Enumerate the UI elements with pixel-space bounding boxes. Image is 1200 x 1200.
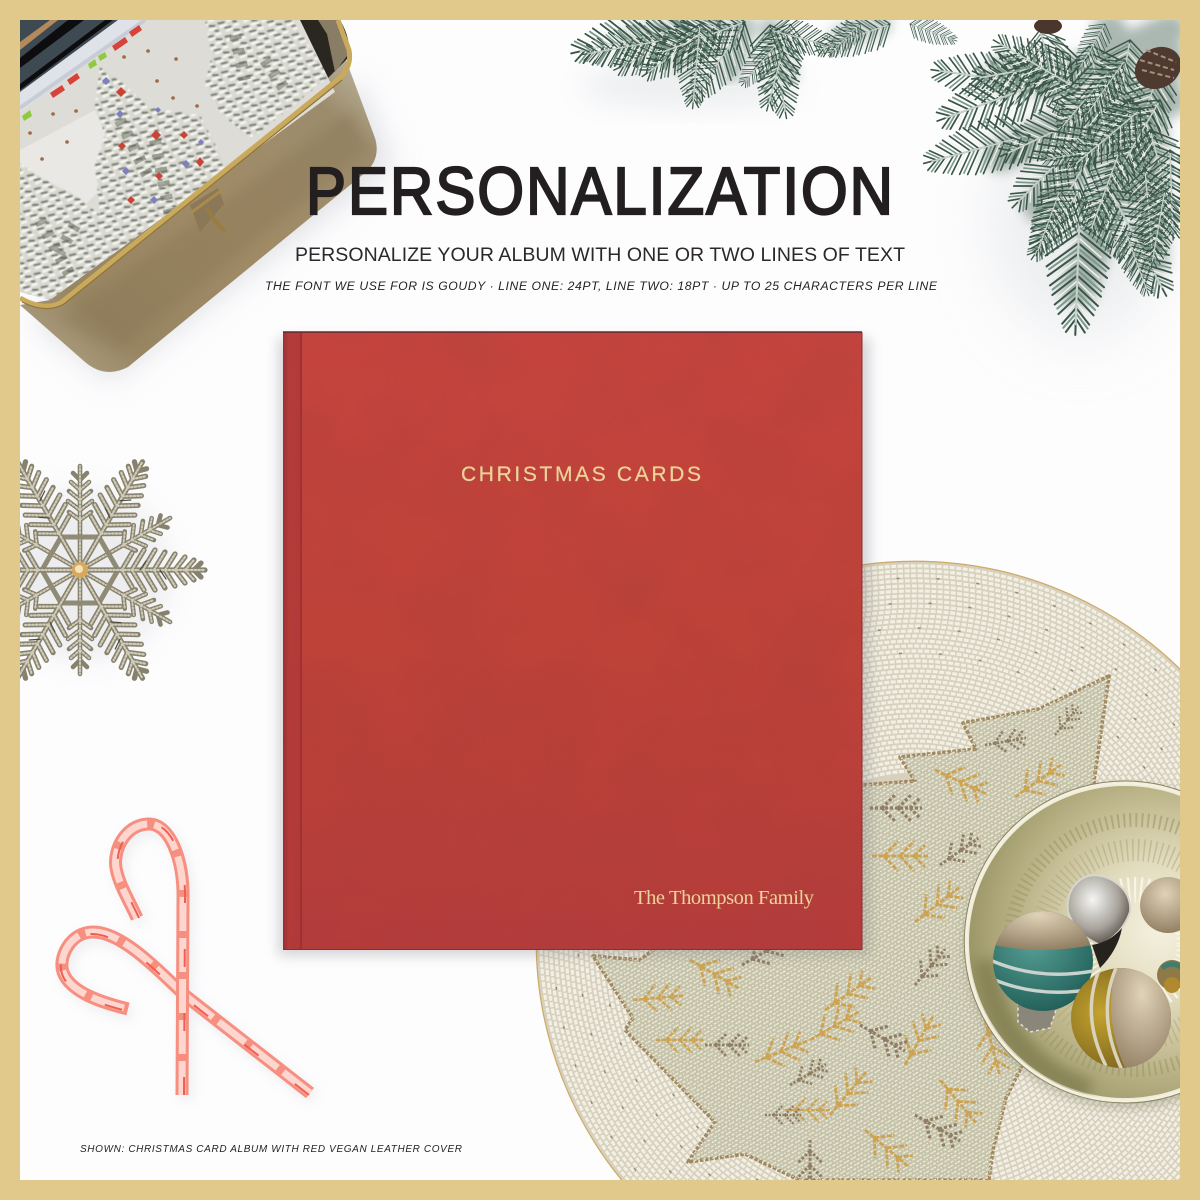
green striped ornament [993, 911, 1093, 1011]
album spine [283, 332, 302, 950]
gold sprigs [632, 753, 1069, 1177]
album top edge [283, 331, 862, 333]
upright cane [116, 824, 185, 1095]
envelopes [20, 20, 118, 92]
album cover [283, 332, 862, 950]
small gold ornament [1157, 960, 1180, 993]
card polka dots [30, 51, 197, 159]
hexagon ring [42, 537, 118, 603]
foil line two: The Thompson Family [634, 887, 815, 909]
small ferns [86, 513, 172, 568]
beaded placemat [536, 561, 1200, 1200]
pine branches, upper left cluster [570, 20, 958, 120]
font details: THE FONT WE USE FOR IS GOUDY · LINE ONE: 24PT, LINE TWO: 18PT · UP TO 25 CHARACTERS PER LINE [265, 279, 938, 293]
airmail stripes [50, 25, 142, 98]
darker tree shadows [40, 35, 285, 275]
large ferns [80, 550, 205, 590]
tree ornaments [116, 87, 204, 204]
subtitle: PERSONALIZE YOUR ALBUM WITH ONE OR TWO LINES OF TEXT [295, 244, 905, 266]
brass bowl with ornaments [964, 781, 1200, 1108]
snowflake ornament [20, 459, 208, 681]
dark box interior [300, 20, 348, 78]
box body [20, 60, 377, 372]
silver beaded sprigs [705, 701, 1086, 1187]
product caption: SHOWN: CHRISTMAS CARD ALBUM WITH RED VEGAN LEATHER COVER [80, 1144, 462, 1155]
glitter fragments [1017, 1004, 1056, 1033]
christmas card stack [20, 20, 350, 310]
gold striped ornament [1071, 968, 1171, 1068]
pine branches, upper right cluster [922, 20, 1180, 336]
small silver ornament [1068, 875, 1130, 968]
foil line one: CHRISTMAS CARDS [461, 463, 701, 486]
pine cones [1034, 20, 1180, 90]
metal box with christmas cards [20, 20, 395, 382]
box latch [190, 188, 225, 232]
brass rim [20, 20, 350, 306]
champagne ornament [1140, 877, 1180, 933]
candy canes [61, 824, 314, 1100]
cane lying across [61, 932, 310, 1095]
red vegan leather album [278, 332, 870, 956]
tree motif on placemat [593, 676, 1110, 1187]
snowy trees [20, 20, 330, 308]
title: PERSONALIZATION [306, 155, 893, 229]
